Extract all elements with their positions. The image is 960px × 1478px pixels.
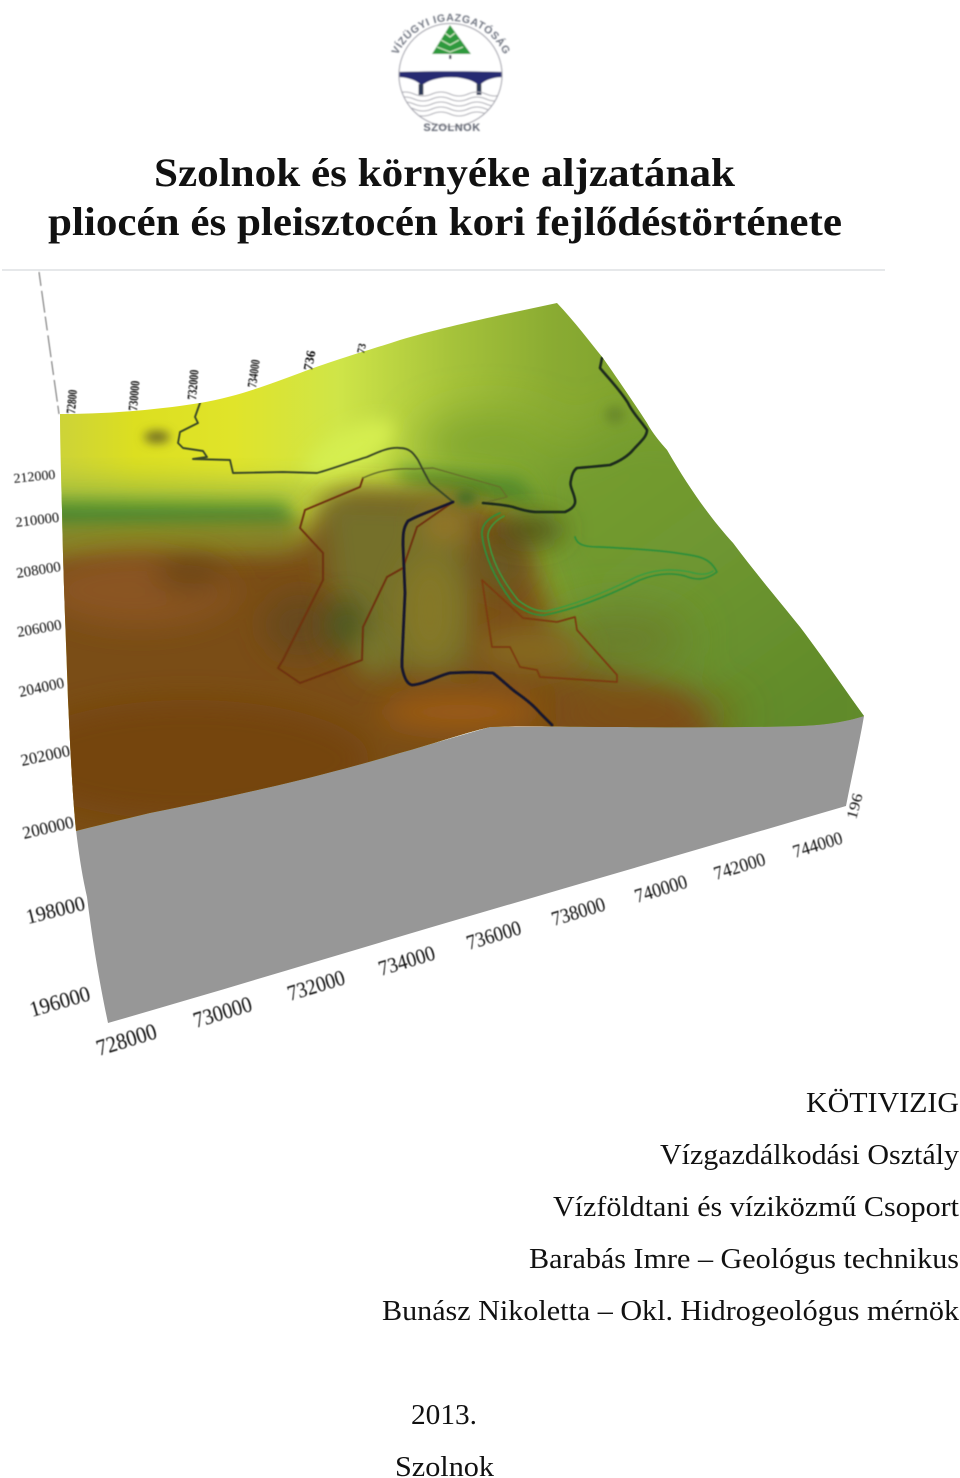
green saddle <box>30 408 540 530</box>
left axis labels: 202000 <box>19 741 72 770</box>
header rule <box>2 269 885 271</box>
top axis labels: 734000 <box>244 359 263 388</box>
vertical axis line <box>39 272 59 414</box>
left axis labels: 208000 <box>15 559 62 582</box>
bottom axis labels: 734000 <box>375 941 438 981</box>
grey block side <box>76 716 864 1023</box>
left axis labels: 198000 <box>23 891 87 929</box>
authors block: Barabás Imre – Geológus technikus <box>529 1243 959 1275</box>
brown lowland <box>62 472 724 831</box>
right colour field <box>408 400 864 728</box>
authors block: Bunász Nikoletta – Okl. Hidrogeológus mérnök <box>382 1295 960 1327</box>
settlement boundary left <box>278 478 453 683</box>
green oxbow channel <box>482 513 717 615</box>
title: pliocén és pleisztocén kori fejlődéstörténete <box>48 199 842 244</box>
authors block: Vízgazdálkodási Osztály <box>660 1139 960 1171</box>
logo: water authority seal <box>390 12 510 134</box>
bottom axis labels: 744000 <box>791 829 845 863</box>
bottom axis labels: 732000 <box>284 965 348 1006</box>
top axis labels: 72800 <box>63 389 80 414</box>
logo tree <box>432 25 471 59</box>
map lines <box>178 358 717 725</box>
left axis labels: 204000 <box>17 675 66 701</box>
colour blobs <box>540 610 740 731</box>
3D terrain map <box>10 272 900 1061</box>
settlement boundary upper <box>363 468 507 503</box>
logo city name: SZOLNOK <box>423 122 481 134</box>
terrain surface <box>60 303 864 831</box>
title: Szolnok és környéke aljzatának <box>154 150 736 195</box>
logo ring <box>399 24 502 126</box>
year and place: 2013. <box>411 1399 477 1431</box>
logo bridge <box>396 71 505 95</box>
settlement boundary right <box>482 580 617 682</box>
soft yellow to green transition <box>30 478 330 512</box>
bottom axis labels: 728000 <box>93 1019 160 1061</box>
authors block: Vízföldtani és víziközmű Csoport <box>553 1191 959 1223</box>
river thin upper section <box>178 403 453 502</box>
top axis labels: 736 <box>300 349 319 372</box>
authors block: KÖTIVIZIG <box>806 1087 959 1119</box>
upper colour field <box>60 303 864 831</box>
bottom axis labels: 730000 <box>190 991 255 1033</box>
bottom axis labels: 742000 <box>711 849 768 885</box>
year and place <box>395 1399 495 1478</box>
olive centre <box>30 495 470 670</box>
left axis labels: 200000 <box>20 812 76 843</box>
river thick main section <box>402 502 552 725</box>
bottom axis labels: 738000 <box>549 894 608 931</box>
top axis labels: 730000 <box>125 380 143 411</box>
authors block <box>382 1087 960 1327</box>
left axis labels: 206000 <box>16 617 63 641</box>
river thick upper right <box>483 358 647 512</box>
left axis labels: 196000 <box>26 981 93 1022</box>
bottom axis labels: 736000 <box>463 915 524 955</box>
bottom axis labels: 740000 <box>632 871 690 908</box>
logo arc text: VÍZÜGYI IGAZGATÓSÁG <box>390 12 510 54</box>
bottom axis labels: 196 <box>844 791 867 821</box>
logo waves <box>396 92 504 116</box>
bottom axis labels <box>93 791 867 1061</box>
left axis labels: 212000 <box>13 467 56 486</box>
left axis labels <box>13 467 93 1022</box>
top axis labels: 73 <box>355 342 369 355</box>
top axis labels: 732000 <box>184 369 202 400</box>
top axis labels <box>63 342 369 414</box>
title <box>48 150 842 244</box>
left axis labels: 210000 <box>15 511 60 531</box>
